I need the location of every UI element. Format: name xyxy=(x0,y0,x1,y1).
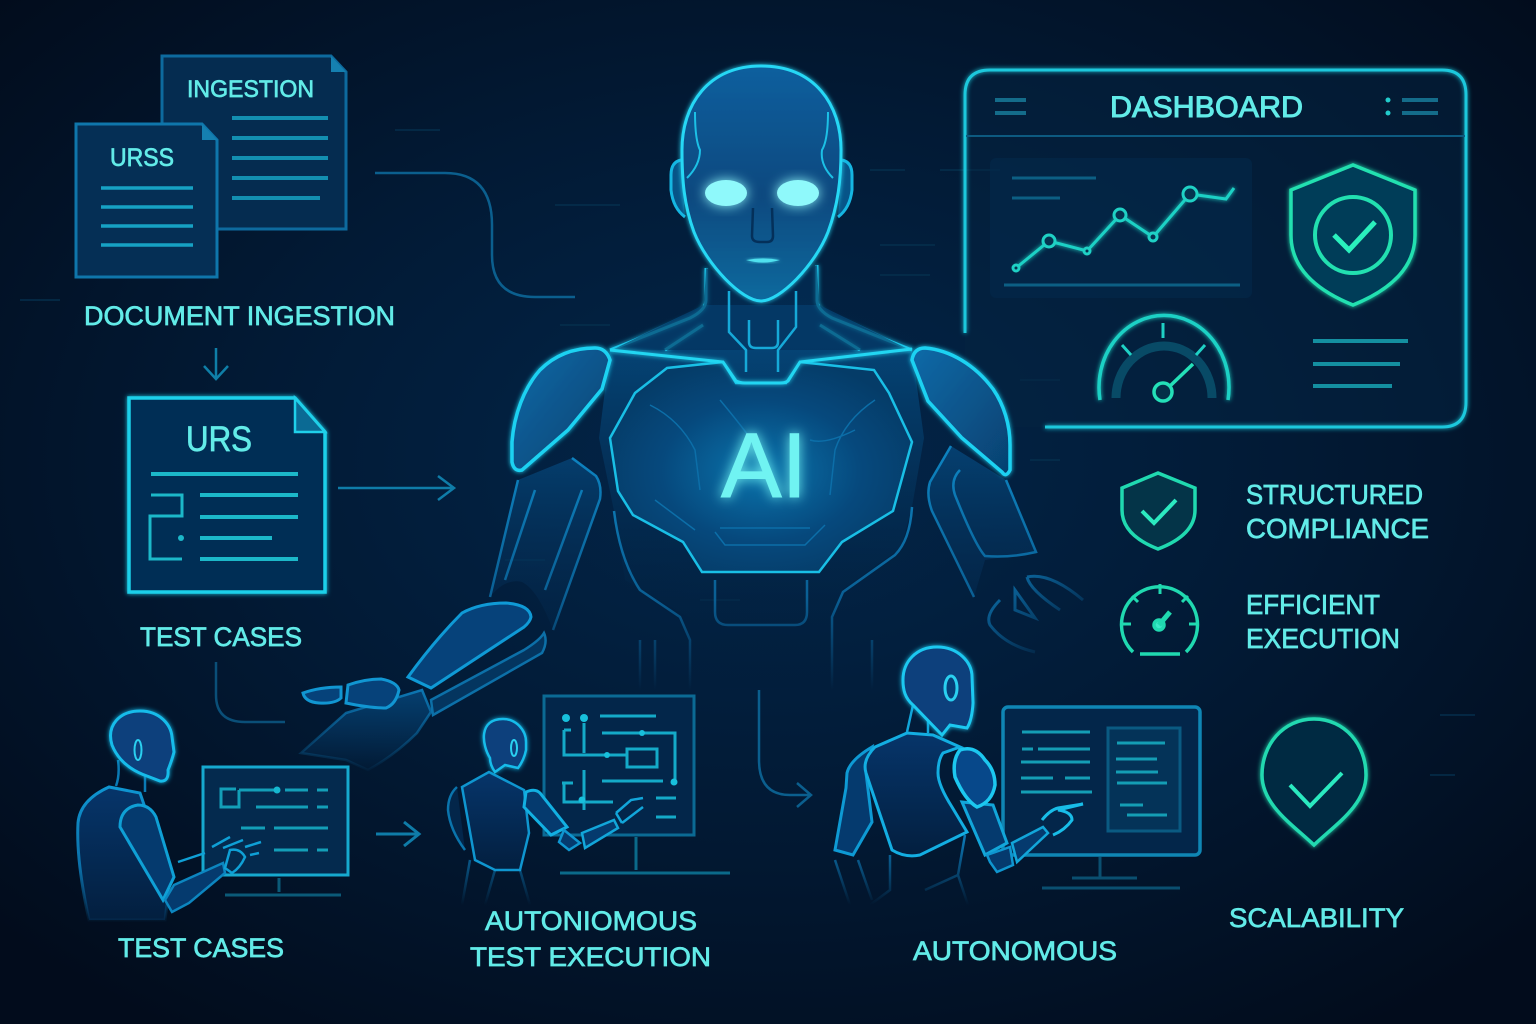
robot eye left xyxy=(705,180,747,206)
label: EFFICIENT xyxy=(1246,589,1380,620)
left shoulder xyxy=(512,348,610,470)
robot right upper arm xyxy=(928,446,1035,597)
figure left arm xyxy=(835,747,872,855)
chest AI label: AI xyxy=(721,415,807,517)
dashboard text lines xyxy=(1313,341,1408,386)
icon: scalability pin check xyxy=(1262,719,1366,845)
icon: stopwatch gauge xyxy=(1120,584,1199,654)
shield icon xyxy=(1291,165,1415,305)
figure head xyxy=(111,711,174,781)
figure hand xyxy=(616,798,643,823)
panel: front document URSS: URSS xyxy=(110,144,174,172)
icon: shield check xyxy=(1122,473,1195,549)
arrow: first worker to second worker xyxy=(376,822,419,846)
robot left upper arm xyxy=(490,458,600,630)
chest veins xyxy=(650,400,875,545)
figure upper arm xyxy=(962,802,1007,855)
figure elbow xyxy=(559,830,580,850)
benefit: efficient execution xyxy=(1120,584,1400,654)
label: autonomous test execution: AUTONIOMOUS xyxy=(485,906,697,936)
panel: URS document xyxy=(129,398,325,592)
robot right arm highlight xyxy=(928,446,1036,597)
label xyxy=(1246,589,1400,654)
figure body xyxy=(462,772,529,870)
label: autonomous test execution xyxy=(470,906,711,972)
lower torso lines xyxy=(614,507,912,690)
robot nose xyxy=(752,208,773,242)
figure body xyxy=(78,787,170,920)
label: autonomous test execution: TEST EXECUTION xyxy=(470,942,711,972)
figure eye xyxy=(945,676,957,700)
robot collar xyxy=(610,349,912,383)
neck detail xyxy=(729,291,796,372)
figure hand xyxy=(178,837,261,873)
neck fill xyxy=(612,265,910,350)
screen xyxy=(544,696,730,873)
robot torso xyxy=(599,305,924,690)
figure arm xyxy=(524,790,567,835)
figure neck xyxy=(116,760,145,792)
arrow: test cases to robot xyxy=(338,476,454,500)
figure legs xyxy=(835,835,968,905)
label: autonomous: AUTONOMOUS xyxy=(913,936,1117,966)
figure neck xyxy=(907,705,928,733)
robot head xyxy=(682,66,841,301)
figure head xyxy=(484,719,526,772)
head side panels xyxy=(687,112,833,178)
figure arm xyxy=(120,805,174,900)
label: EXECUTION xyxy=(1246,623,1400,654)
label xyxy=(1246,479,1429,544)
screen xyxy=(1003,707,1200,888)
robot mouth xyxy=(746,258,780,262)
worker 1 xyxy=(78,711,348,920)
panel: URS document: URS xyxy=(186,420,252,459)
dashboard background xyxy=(965,70,1466,427)
panel: back document INGESTION xyxy=(162,56,346,229)
panel: front document URSS xyxy=(76,124,217,277)
panel: back document INGESTION: INGESTION xyxy=(187,76,314,103)
figure forearm xyxy=(582,820,618,848)
figure eye xyxy=(511,740,517,756)
figure head xyxy=(903,647,973,735)
worker 2 xyxy=(448,696,730,905)
arrow: document ingestion down xyxy=(204,348,228,379)
label: test cases: TEST CASES xyxy=(140,622,302,652)
dashboard title: DASHBOARD xyxy=(1110,91,1303,124)
robot right ear xyxy=(838,160,852,217)
figure legs xyxy=(462,860,530,905)
robot right hand xyxy=(989,576,1083,652)
connector: test cases to lower row xyxy=(216,662,285,722)
robot eye right xyxy=(777,180,819,206)
figure hand xyxy=(1042,804,1083,835)
robot left arm highlight xyxy=(490,458,600,630)
label: test cases lower: TEST CASES xyxy=(118,933,284,963)
label: document ingestion: DOCUMENT INGESTION xyxy=(84,301,395,331)
label: STRUCTURED xyxy=(1246,479,1423,510)
arrow: robot to third worker xyxy=(759,690,811,807)
robot forearm xyxy=(408,603,531,688)
neck outer lines xyxy=(610,265,912,350)
panel: dashboard xyxy=(965,70,1466,427)
figure forearm xyxy=(165,863,225,912)
gauge xyxy=(1099,315,1229,401)
central robot xyxy=(301,66,1083,770)
dashboard menu icons xyxy=(995,100,1438,113)
screen xyxy=(203,767,348,895)
figure body xyxy=(865,733,967,856)
figure shoulder xyxy=(954,749,995,807)
benefit: structured compliance xyxy=(1122,473,1429,549)
right shoulder xyxy=(912,348,1010,475)
robot hand xyxy=(301,679,431,770)
figure eye xyxy=(134,740,142,760)
worker 3 xyxy=(835,647,1200,905)
figure left arm xyxy=(448,787,465,850)
figure elbow xyxy=(987,847,1013,872)
figure forearm xyxy=(1012,827,1048,862)
dashboard frame xyxy=(965,70,1466,427)
robot forearm lower xyxy=(431,633,546,715)
label: scalability: SCALABILITY xyxy=(1229,903,1404,933)
line chart xyxy=(990,158,1252,298)
label: COMPLIANCE xyxy=(1246,513,1429,544)
connector: ingestion to robot xyxy=(375,173,575,297)
chest plate xyxy=(610,362,912,572)
robot left ear xyxy=(671,160,685,217)
